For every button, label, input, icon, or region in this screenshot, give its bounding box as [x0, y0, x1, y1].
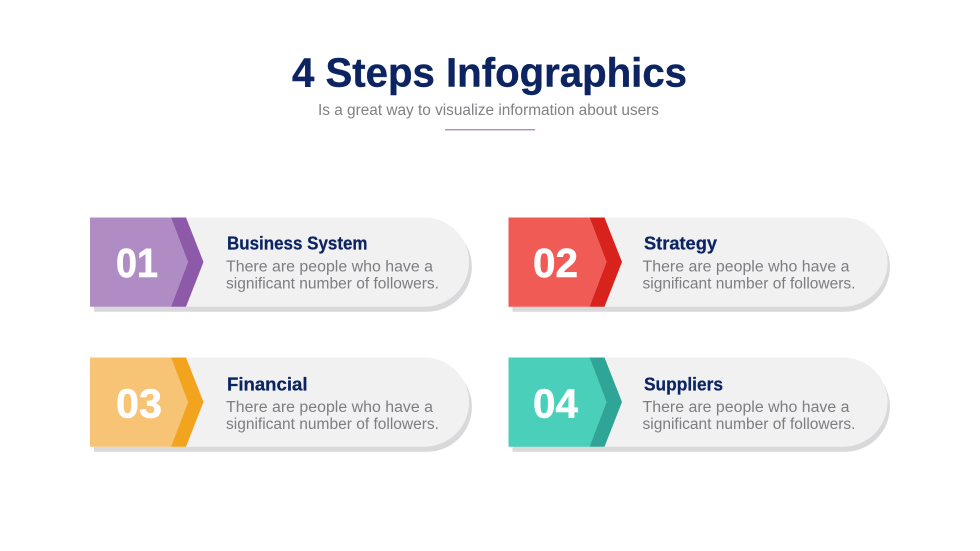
card shadow — [94, 362, 472, 452]
number: 04 — [533, 380, 578, 426]
card shadow — [512, 222, 890, 312]
description: significant number of followers. — [642, 416, 856, 433]
heading: Suppliers — [644, 374, 723, 394]
description: There are people who have a — [642, 399, 850, 416]
panel: step 04 Suppliers — [508, 358, 890, 452]
panel: step 03 Financial — [90, 358, 472, 452]
number tab — [90, 218, 188, 307]
number: 02 — [533, 240, 578, 286]
heading: Business System — [227, 232, 368, 254]
chevron — [171, 218, 204, 307]
chevron — [590, 358, 622, 447]
number: 03 — [116, 380, 162, 426]
description: significant number of followers. — [226, 276, 439, 292]
heading: Financial — [227, 374, 308, 394]
card shadow — [512, 362, 890, 452]
card body — [90, 358, 469, 447]
description: There are people who have a — [226, 399, 433, 416]
description: significant number of followers. — [226, 416, 439, 433]
panel: step 01 Business System — [90, 218, 472, 312]
number tab — [90, 358, 188, 447]
number: 01 — [116, 240, 158, 286]
card shadow — [94, 222, 472, 312]
card body — [508, 358, 888, 447]
chevron — [171, 358, 204, 447]
heading: Strategy — [644, 232, 718, 254]
card body — [90, 218, 469, 307]
card body — [508, 218, 888, 307]
panel: step 02 Strategy — [508, 218, 890, 312]
number tab — [508, 218, 606, 307]
number tab — [508, 358, 606, 447]
description: significant number of followers. — [642, 276, 856, 292]
description: There are people who have a — [642, 258, 850, 276]
description: There are people who have a — [226, 258, 433, 276]
chevron — [590, 218, 622, 307]
subtitle: Is a great way to visualize information about users — [318, 102, 659, 119]
title: 4 Steps Infographics — [292, 50, 687, 96]
title underline — [445, 129, 535, 130]
